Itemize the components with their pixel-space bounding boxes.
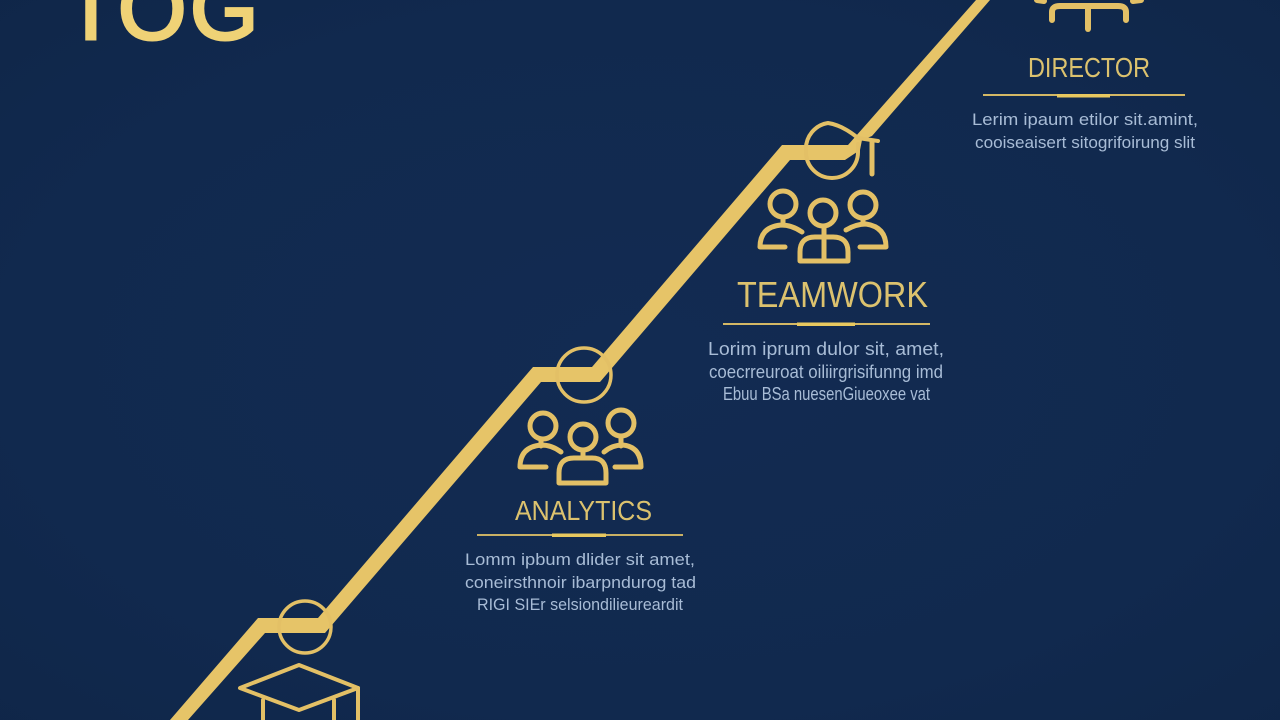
panel: teamwork [708, 191, 944, 404]
milestone ring: teamwork [806, 123, 878, 178]
text block: director [972, 110, 1198, 152]
panel: analytics [465, 410, 696, 614]
text block: teamwork: Lorim iprum dulor sit, amet, [708, 339, 944, 359]
text block: analytics: coneirsthnoir ibarpndurog tad [465, 573, 696, 592]
milestone ring: analytics [557, 348, 611, 402]
text block: teamwork: Ebuu BSa nuesenGiueoxee vat [723, 384, 930, 404]
text block: analytics [465, 550, 696, 614]
text block: analytics: Lomm ipbum dlider sit amet, [465, 550, 695, 569]
divider: teamwork [723, 322, 930, 326]
panel: director [972, 0, 1198, 152]
divider: director [983, 94, 1185, 98]
career path line [170, 0, 990, 720]
text block: director: Lerim ipaum etilor sit.amint, [972, 110, 1198, 129]
text block: director: cooiseaisert sitogrifoirung slit [975, 133, 1195, 152]
icon: teamwork people [760, 191, 886, 261]
text block: analytics: RIGI SIEr selsiondilieureardit [477, 595, 683, 614]
icon: analytics people [520, 410, 641, 483]
icon: director chair [1037, 0, 1141, 29]
divider: analytics [477, 534, 683, 537]
text block: teamwork: coecrreuroat oiliirgrisifunng imd [709, 362, 943, 382]
heading: director: DIRECTOR [1028, 52, 1150, 83]
milestone ring: education [279, 601, 331, 653]
heading: teamwork: TEAMWORK [737, 274, 928, 315]
text block: teamwork [708, 339, 944, 404]
heading: analytics: ANALYTICS [515, 495, 652, 526]
icon: graduation cap [240, 665, 358, 720]
